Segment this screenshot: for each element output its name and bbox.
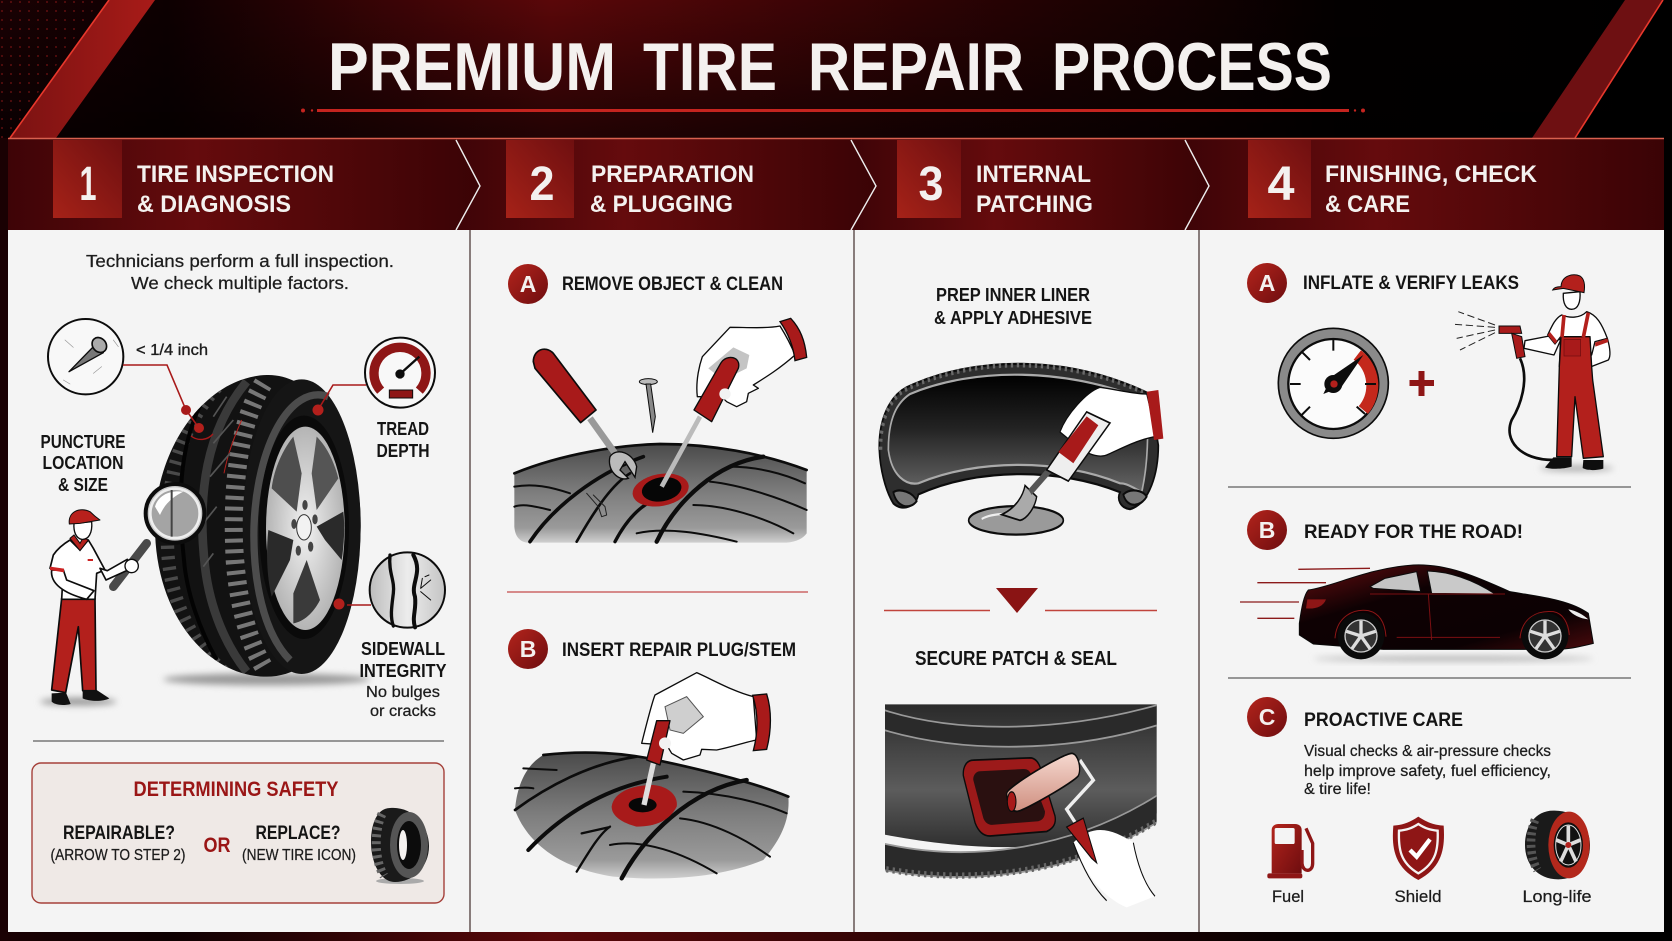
title: REPAIR: [808, 29, 1024, 105]
step 1 heading: & DIAGNOSIS: [137, 191, 291, 218]
step 4 heading: & CARE: [1325, 191, 1410, 218]
callout: sidewall integrity: SIDEWALL: [361, 639, 445, 659]
callout: tread depth: [312, 338, 435, 461]
step B heading: READY FOR THE ROAD!: [1304, 522, 1523, 543]
callout: sidewall integrity: [334, 552, 446, 720]
panel: internal patching: [879, 285, 1163, 907]
label: shield: Shield: [1394, 888, 1442, 906]
removed nail: [639, 379, 657, 433]
callout: determining safety: [32, 763, 444, 903]
step B badge: B: [520, 636, 536, 662]
header band: 2: [530, 158, 554, 211]
callout: determining safety: DETERMINING SAFETY: [134, 778, 338, 801]
divider arrow: [884, 588, 1157, 613]
label: puncture location: [40, 432, 126, 495]
roller tool: [1007, 753, 1155, 907]
header band: [8, 138, 1664, 230]
step 3 heading: INTERNAL: [976, 161, 1091, 188]
right diagonal accent band: [1532, 0, 1663, 138]
callout: determining safety: (NEW TIRE ICON): [242, 847, 356, 864]
step C badge: C: [1259, 704, 1275, 730]
callout: determining safety: REPAIRABLE?: [63, 823, 175, 844]
tire illustration: [113, 375, 370, 685]
brush and adhesive tube: [1002, 387, 1163, 520]
callout: determining safety: OR: [204, 834, 230, 857]
background vertical fade: [0, 0, 1672, 138]
label: long-life: Long-life: [1522, 888, 1592, 906]
callout: tread depth: TREAD: [377, 419, 429, 439]
callout: determining safety: REPLACE?: [256, 823, 340, 844]
proactive care text: & tire life!: [1304, 781, 1371, 798]
substep heading: secure patch: SECURE PATCH & SEAL: [915, 648, 1117, 670]
gloved hand with brush: [662, 318, 807, 487]
icon: pressure gauge: [1278, 328, 1388, 438]
header band: 4: [1268, 158, 1295, 211]
step C heading: PROACTIVE CARE: [1304, 710, 1463, 731]
panel: tire inspection: [32, 251, 446, 903]
step 3 heading: [976, 161, 1093, 218]
step A badge: [508, 264, 548, 304]
step 3 number: [897, 140, 961, 218]
panel: finishing check and care: [1228, 263, 1631, 906]
title: PROCESS: [1052, 29, 1332, 105]
magnifying glass: [113, 484, 204, 587]
step B badge: [1247, 510, 1287, 550]
header band: 3: [918, 158, 944, 211]
illustration: car: [1240, 565, 1593, 661]
step 4 number: [1248, 140, 1311, 218]
callout: nail puncture: [48, 319, 213, 439]
intro text: We check multiple factors.: [131, 273, 349, 293]
proactive care text: help improve safety, fuel efficiency,: [1304, 763, 1551, 780]
screwdriver tool: [533, 349, 637, 479]
title: [328, 29, 1332, 105]
intro text: [86, 251, 394, 293]
substep heading: prep liner: & APPLY ADHESIVE: [934, 308, 1092, 328]
white panel background: [8, 230, 1664, 932]
step B badge: B: [1259, 517, 1275, 543]
step 2 heading: PREPARATION: [591, 161, 754, 188]
header band: 1: [80, 158, 96, 211]
step 1 heading: [137, 161, 334, 218]
step A badge: A: [520, 271, 536, 297]
callout: sidewall integrity: No bulges: [366, 684, 440, 701]
substep heading: prep liner: PREP INNER LINER: [936, 285, 1090, 305]
icon: new tire: [371, 808, 429, 884]
label: fuel: Fuel: [1272, 888, 1304, 906]
step B heading: INSERT REPAIR PLUG/STEM: [562, 640, 796, 661]
left dotted texture: [0, 0, 100, 138]
step A heading: INFLATE & VERIFY LEAKS: [1303, 273, 1519, 294]
panel separators: [470, 230, 1199, 932]
step 3 heading: PATCHING: [976, 191, 1093, 218]
step 2 number: [506, 140, 574, 218]
icon: fuel: [1267, 824, 1313, 878]
left diagonal accent stroke: [10, 0, 109, 138]
plus sign: [1410, 371, 1434, 396]
step 2 heading: & PLUGGING: [590, 191, 733, 218]
step 4 heading: FINISHING, CHECK: [1325, 161, 1538, 188]
title: PREMIUM: [328, 29, 616, 105]
illustration: secure patch: [880, 704, 1160, 907]
step 1 number: [53, 140, 122, 218]
callout: determining safety: (ARROW TO STEP 2): [50, 847, 186, 864]
right diagonal accent stroke: [1575, 0, 1663, 138]
label: puncture location: & SIZE: [58, 475, 108, 495]
icon: shield: [1393, 817, 1444, 880]
callout: sidewall integrity: or cracks: [370, 703, 436, 720]
intro text: Technicians perform a full inspection.: [86, 251, 394, 271]
callout: nail puncture: < 1/4 inch: [136, 342, 208, 359]
step A badge: A: [1259, 270, 1275, 296]
illustration: remove object: [514, 318, 807, 543]
step 4 heading: [1325, 161, 1538, 218]
technician with spray gun: [1455, 275, 1613, 471]
proactive care text: [1304, 743, 1551, 798]
proactive care text: Visual checks & air-pressure checks: [1304, 743, 1551, 760]
step C badge: [1247, 697, 1287, 737]
title: TIRE: [643, 29, 777, 105]
icon: long-life tire: [1525, 811, 1590, 879]
step 1 heading: TIRE INSPECTION: [137, 161, 334, 188]
callout: tread depth: DEPTH: [376, 441, 430, 461]
substep heading: prep liner: [934, 285, 1092, 328]
left diagonal accent band: [10, 0, 155, 138]
label: puncture location: LOCATION: [42, 453, 124, 473]
gloved hand with plug tool: [642, 673, 770, 805]
step A heading: REMOVE OBJECT & CLEAN: [562, 274, 783, 295]
callout: sidewall integrity: INTEGRITY: [360, 661, 446, 681]
step B badge: [508, 629, 548, 669]
panel: preparation and plugging: [507, 264, 808, 879]
step A badge: [1247, 263, 1287, 303]
illustration: apply adhesive: [879, 364, 1163, 535]
title underline: [301, 108, 1365, 112]
label: puncture location: PUNCTURE: [40, 432, 126, 452]
step 2 heading: [590, 161, 754, 218]
illustration: insert plug: [515, 673, 789, 879]
technician with magnifier: [40, 510, 138, 706]
